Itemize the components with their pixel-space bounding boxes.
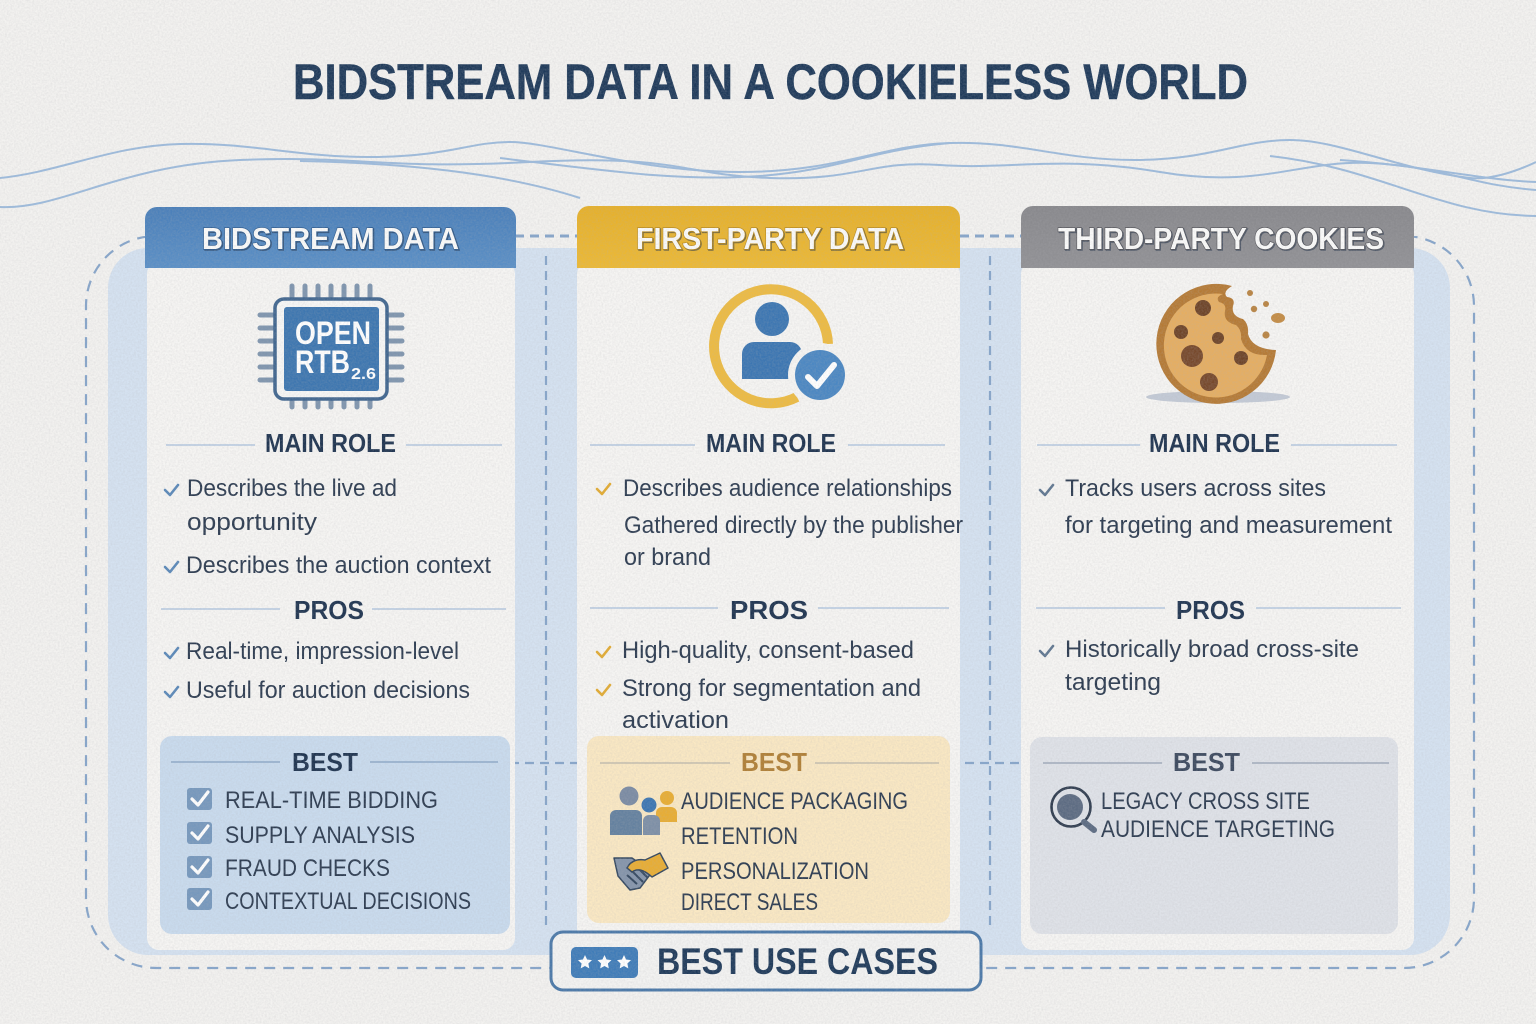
best box: first-party: BEST <box>741 747 807 777</box>
icon: three stars <box>571 947 638 978</box>
pros list: targeting <box>1065 669 1161 696</box>
dashed connectors between columns <box>510 236 1030 925</box>
best box: third-party <box>1030 737 1398 934</box>
best box: bidstream: BEST <box>292 747 358 777</box>
icon: OpenRTB chip <box>260 286 402 407</box>
heading: pros: PROS <box>730 595 808 625</box>
main role list: Describes the live ad <box>187 475 397 502</box>
icon: OpenRTB chip: 2.6 <box>351 366 376 383</box>
heading: main role: MAIN ROLE <box>1149 428 1280 458</box>
best list <box>681 788 908 916</box>
best box: first-party <box>587 736 950 923</box>
header: first-party data: FIRST-PARTY DATA <box>636 221 904 256</box>
badge: best use cases: BEST USE CASES <box>657 941 938 982</box>
dashed flow outline <box>86 236 1474 968</box>
icon: handshake <box>614 853 668 890</box>
panel: bidstream data <box>145 207 516 950</box>
checkbox list: REAL-TIME BIDDING <box>225 787 438 814</box>
heading: pros: PROS <box>1176 595 1245 625</box>
icon: OpenRTB chip: OPEN <box>295 315 371 351</box>
main role list: Tracks users across sites <box>1065 475 1326 502</box>
checkbox list: FRAUD CHECKS <box>225 855 390 882</box>
main role list <box>1040 475 1392 539</box>
main role list <box>597 475 963 571</box>
pros list: Real-time, impression-level <box>186 638 459 665</box>
checkbox list: CONTEXTUAL DECISIONS <box>225 888 471 915</box>
pros list <box>597 637 921 734</box>
icon: OpenRTB chip: RTB <box>295 344 350 380</box>
main role list: for targeting and measurement <box>1065 512 1392 539</box>
best list: DIRECT SALES <box>681 889 818 916</box>
icon: bitten cookie <box>1146 284 1290 404</box>
header: bidstream data <box>145 207 516 268</box>
icon: verified audience person <box>714 289 852 407</box>
pros list <box>1040 636 1359 696</box>
header: third-party cookies <box>1021 206 1414 268</box>
checkbox list: SUPPLY ANALYSIS <box>225 822 415 849</box>
heading: main role: MAIN ROLE <box>265 428 396 458</box>
blue backdrop band <box>108 248 1450 955</box>
panel body <box>577 262 960 950</box>
pros list: Strong for segmentation and <box>622 675 921 702</box>
icon: audience group <box>610 786 677 835</box>
best list: AUDIENCE TARGETING <box>1101 816 1335 843</box>
main role list: or brand <box>624 544 711 571</box>
header: first-party data <box>577 206 960 268</box>
pros list: Useful for auction decisions <box>186 677 470 704</box>
pros list: Historically broad cross-site <box>1065 636 1359 663</box>
main role list: Describes audience relationships <box>623 475 952 502</box>
pros list <box>165 638 470 704</box>
flowing data stream waves <box>0 140 1536 216</box>
main role list <box>165 475 491 579</box>
heading: main role: MAIN ROLE <box>706 428 836 458</box>
checkbox list <box>187 787 471 915</box>
heading: pros: PROS <box>294 595 364 625</box>
panel: third-party cookies <box>1021 206 1414 950</box>
main role list: Describes the auction context <box>186 552 491 579</box>
header: third-party cookies: THIRD-PARTY COOKIES <box>1058 221 1384 256</box>
best list <box>1101 788 1335 843</box>
main role list: opportunity <box>187 509 317 536</box>
best list: AUDIENCE PACKAGING <box>681 788 908 815</box>
title: BIDSTREAM DATA IN A COOKIELESS WORLD <box>293 54 1248 110</box>
pros list: High-quality, consent-based <box>622 637 914 664</box>
panel: first-party data <box>577 206 963 950</box>
best box: bidstream <box>160 736 510 934</box>
badge: best use cases <box>551 932 981 990</box>
panel body <box>147 262 515 950</box>
icon: magnifier <box>1052 788 1094 830</box>
header: bidstream data: BIDSTREAM DATA <box>202 221 459 256</box>
best list: PERSONALIZATION <box>681 858 869 885</box>
panel body <box>1021 262 1414 950</box>
pros list: activation <box>622 707 729 734</box>
best box: third-party: BEST <box>1173 747 1240 777</box>
best list: LEGACY CROSS SITE <box>1101 788 1310 815</box>
best list: RETENTION <box>681 823 798 850</box>
main role list: Gathered directly by the publisher <box>624 512 963 539</box>
